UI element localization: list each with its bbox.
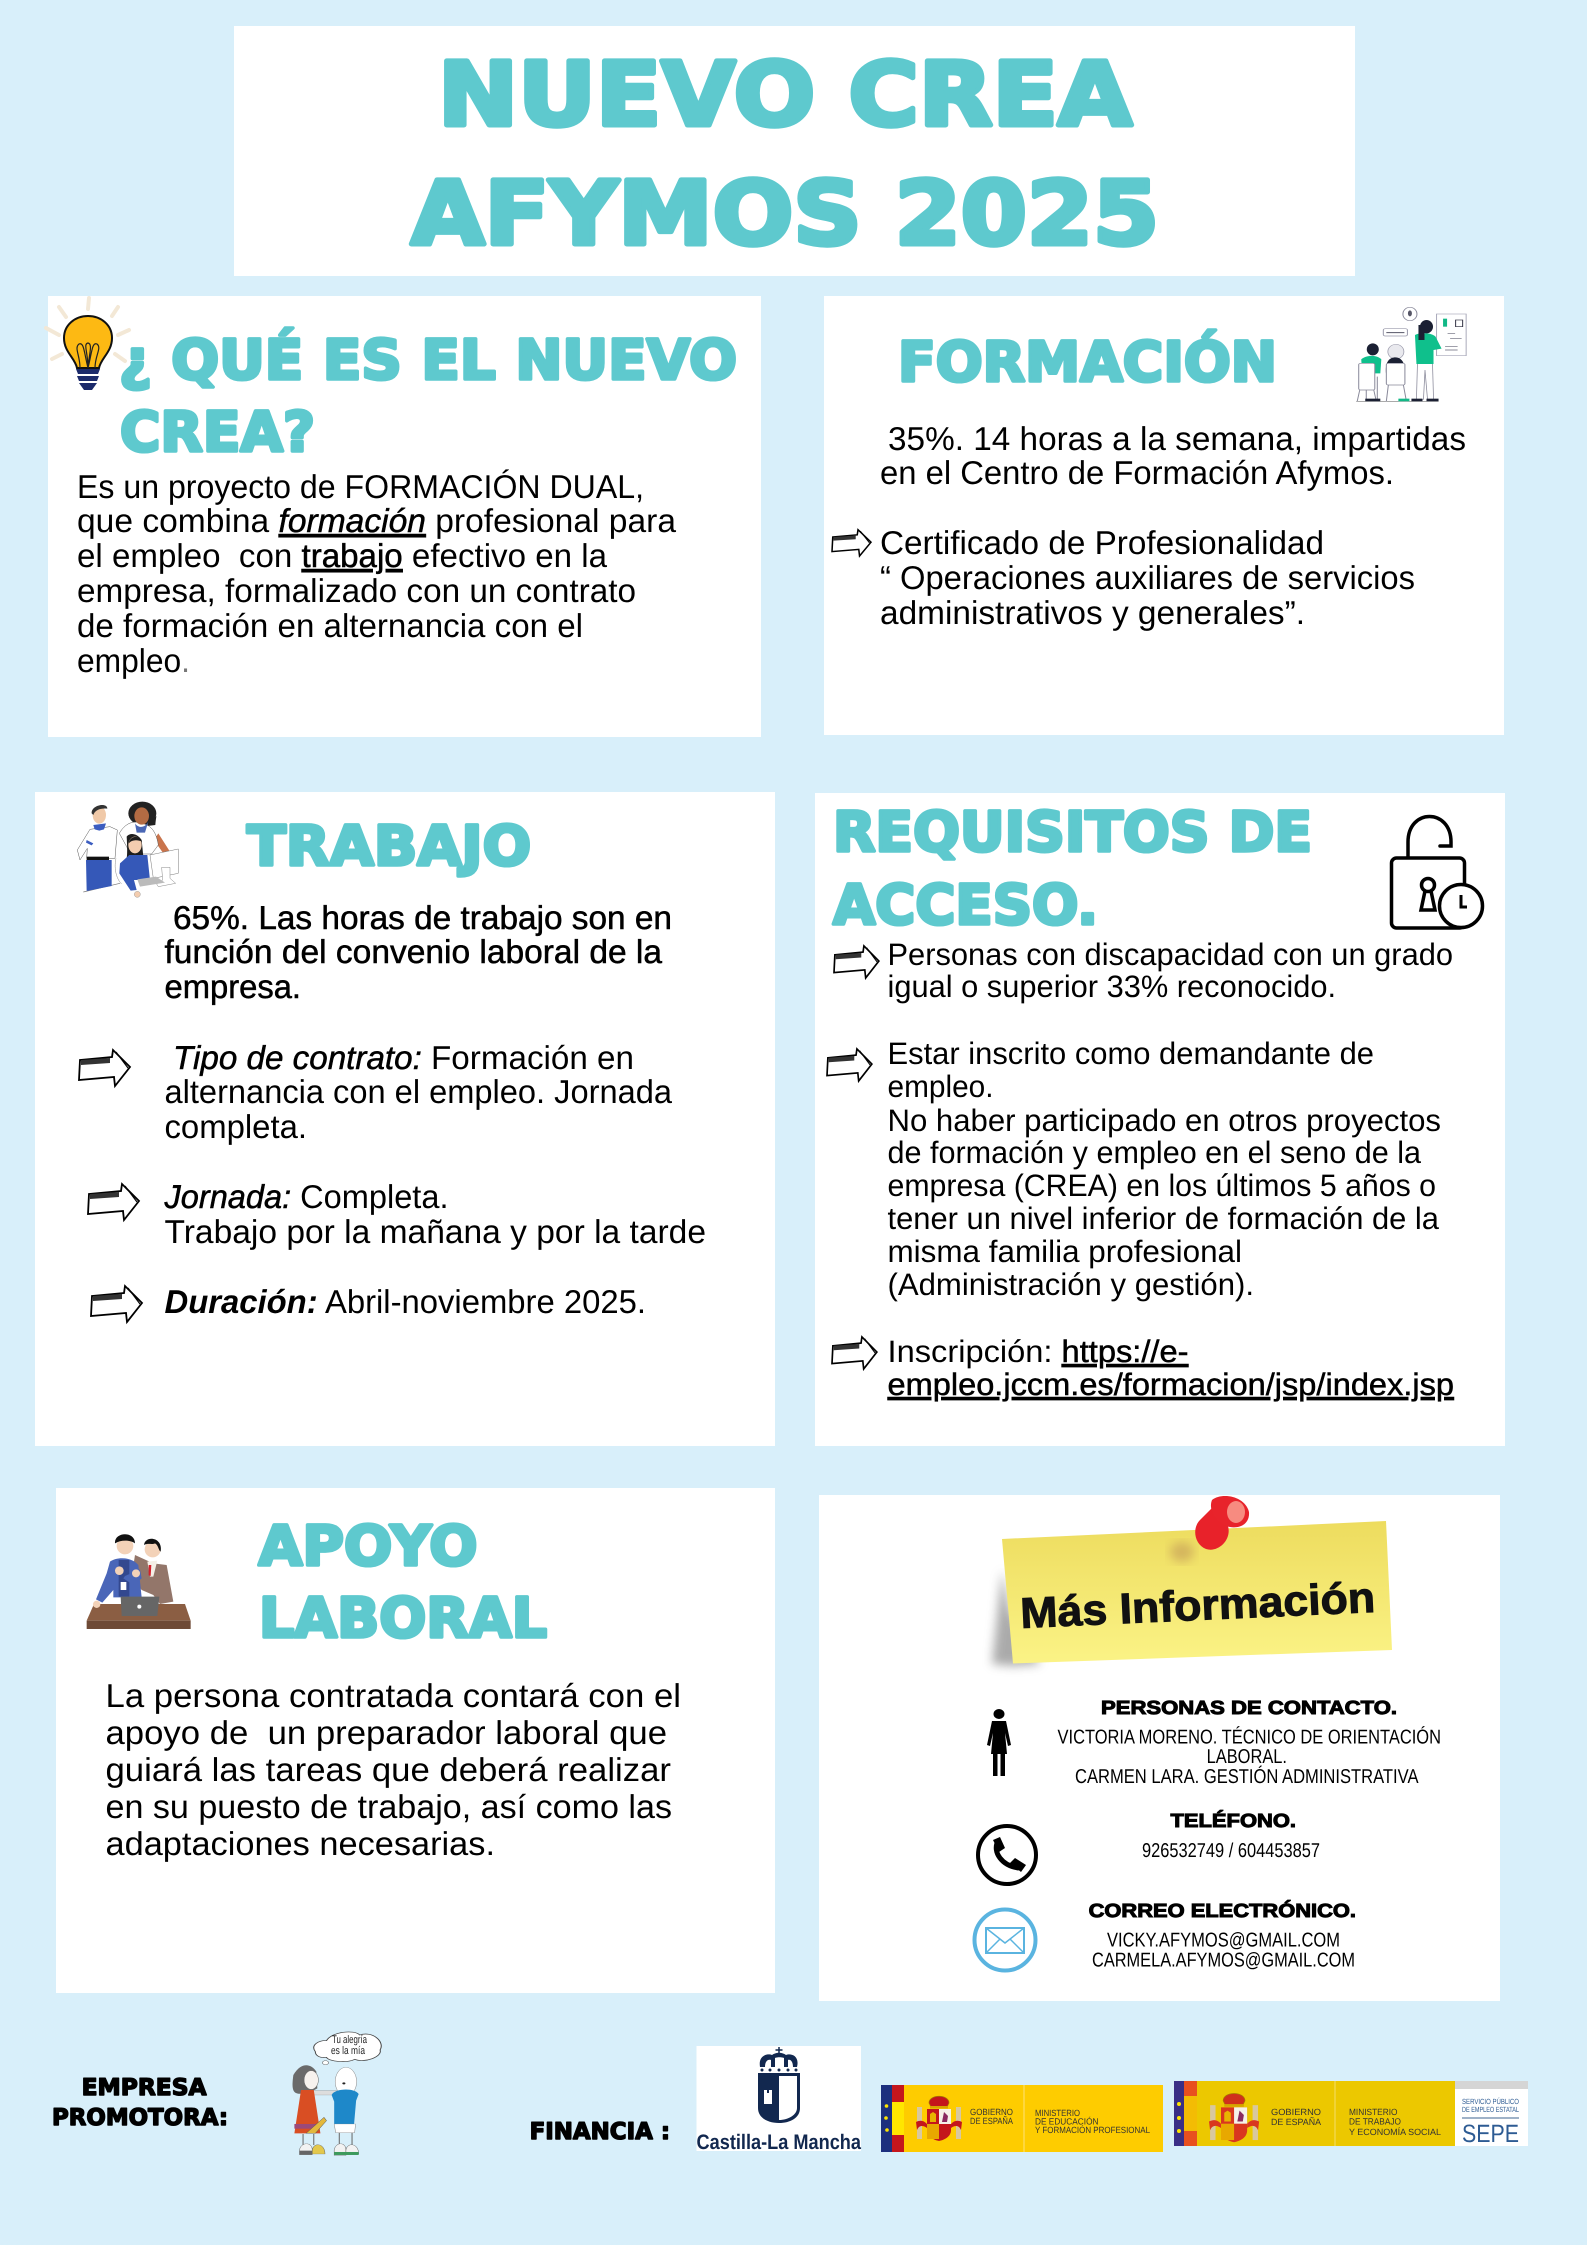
labels: GOBIERNO xyxy=(1271,2107,1321,2117)
icon: light bulb xyxy=(46,298,129,390)
icon: telephone xyxy=(978,1826,1036,1884)
panel: formación xyxy=(824,296,1504,735)
contact people xyxy=(1058,1698,1441,1788)
logo: children illustration xyxy=(293,2032,381,2155)
text block: apoyo de un preparador laboral que xyxy=(106,1714,667,1751)
labels: DE EDUCACIÓN xyxy=(1035,2116,1098,2126)
arrow xyxy=(88,1184,139,1220)
text block: alternancia con el empleo. Jornada xyxy=(164,1073,673,1110)
text block xyxy=(880,420,1466,491)
text block: igual o superior 33% reconocido. xyxy=(888,969,1336,1004)
heading: FORMACIÓN xyxy=(898,330,1277,394)
text block: que combina formación profesional para xyxy=(77,502,677,539)
logo: SEPE xyxy=(1455,2081,1528,2148)
text block xyxy=(888,1334,1454,1402)
email: VICKY.AFYMOS@GMAIL.COM xyxy=(1107,1930,1340,1952)
funder label: FINANCIA : xyxy=(530,2119,670,2145)
text block: de formación y empleo en el seno de la xyxy=(888,1135,1422,1170)
heading: REQUISITOS DE xyxy=(833,800,1312,864)
arrow xyxy=(91,1286,142,1322)
phone xyxy=(1142,1810,1320,1862)
logo: Castilla-La Mancha xyxy=(696,2046,861,2154)
labels: MINISTERIO xyxy=(1035,2108,1080,2118)
phone: TELÉFONO. xyxy=(1170,1810,1296,1832)
text block xyxy=(164,899,672,1005)
text block: función del convenio laboral de la xyxy=(164,933,663,970)
contact people: LABORAL. xyxy=(1207,1746,1287,1768)
contact people: VICTORIA MORENO. TÉCNICO DE ORIENTACIÓN xyxy=(1058,1726,1441,1748)
icon: classroom illustration xyxy=(1356,307,1466,401)
arrow xyxy=(827,1049,872,1081)
text block: Trabajo por la mañana y por la tarde xyxy=(164,1213,706,1250)
title xyxy=(234,26,1355,276)
heading xyxy=(258,1514,547,1650)
text block: Personas con discapacidad con un grado xyxy=(888,937,1453,972)
logo: children illustration: Tu alegría xyxy=(332,2034,368,2046)
email: CARMELA.AFYMOS@GMAIL.COM xyxy=(1092,1950,1355,1972)
promoter label xyxy=(52,2075,228,2131)
labels: Y FORMACIÓN PROFESIONAL xyxy=(1035,2125,1150,2135)
labels xyxy=(970,2107,1150,2135)
contact people: PERSONAS DE CONTACTO. xyxy=(1101,1698,1397,1719)
text block: guiará las tareas que deberá realizar xyxy=(106,1751,671,1788)
text block xyxy=(77,468,677,679)
panel: más información xyxy=(819,1495,1500,2001)
panel: trabajo xyxy=(35,792,775,1446)
heading: CREA? xyxy=(120,400,315,464)
text block: adaptaciones necesarias. xyxy=(106,1825,495,1862)
icon: team illustration xyxy=(77,802,178,897)
logo: Castilla-La Mancha: Castilla-La Mancha xyxy=(696,2131,861,2154)
heading: TRABAJO xyxy=(247,814,531,878)
email: CORREO ELECTRÓNICO. xyxy=(1089,1900,1356,1922)
labels: DE ESPAÑA xyxy=(970,2116,1013,2126)
arrow xyxy=(79,1050,130,1086)
text block: No haber participado en otros proyectos xyxy=(888,1103,1441,1138)
text block: Duración: Abril-noviembre 2025. xyxy=(164,1283,646,1320)
text block: empresa (CREA) en los últimos 5 años o xyxy=(888,1168,1436,1203)
promoter label: PROMOTORA: xyxy=(52,2105,228,2131)
logo: SEPE: SEPE xyxy=(1462,2120,1519,2148)
icon: red push pin xyxy=(1170,1496,1249,1562)
logo: Gobierno de España, Ministerio de Trabajo y SEPE xyxy=(1174,2081,1528,2148)
heading: ACCESO. xyxy=(833,873,1098,937)
text block xyxy=(164,1178,706,1250)
text block: el empleo con trabajo efectivo en la xyxy=(77,537,608,574)
text block: tener un nivel inferior de formación de la xyxy=(888,1201,1440,1236)
text block xyxy=(880,524,1415,631)
heading: LABORAL xyxy=(259,1586,547,1650)
heading: ¿ QUÉ ES EL NUEVO xyxy=(119,328,737,392)
text block: Certificado de Profesionalidad xyxy=(880,524,1324,561)
labels: MINISTERIO xyxy=(1349,2107,1398,2117)
logo: SEPE: SERVICIO PÚBLICO xyxy=(1462,2097,1519,2106)
icon: two colleagues at a desk xyxy=(87,1534,191,1629)
text block: 65%. Las horas de trabajo son en xyxy=(173,899,672,936)
logo: children illustration: es la mía xyxy=(331,2045,366,2057)
text block: de formación en alternancia con el xyxy=(77,607,583,644)
text block xyxy=(164,1039,673,1145)
logo: SEPE: DE EMPLEO ESTATAL xyxy=(1462,2105,1519,2114)
arrow xyxy=(832,530,871,556)
text block xyxy=(106,1677,681,1862)
icon: padlock with clock xyxy=(1392,816,1482,928)
logo: Gobierno de España, Ministerio de Educación xyxy=(881,2085,1163,2152)
text block: Tipo de contrato: Formación en xyxy=(173,1039,634,1076)
labels: Y ECONOMÍA SOCIAL xyxy=(1349,2127,1441,2137)
text block: empresa. xyxy=(164,968,301,1005)
text block xyxy=(888,1036,1441,1302)
text block: empresa, formalizado con un contrato xyxy=(77,572,636,609)
icon: woman xyxy=(987,1709,1011,1776)
text block: misma familia profesional xyxy=(888,1234,1242,1269)
title: NUEVO CREA xyxy=(438,43,1132,146)
text block: Inscripción: https://e- xyxy=(888,1334,1188,1369)
labels: DE TRABAJO xyxy=(1349,2116,1401,2126)
sticky note: Más Información xyxy=(1019,1574,1376,1638)
text block: administrativos y generales”. xyxy=(880,594,1305,631)
text block: Estar inscrito como demandante de xyxy=(888,1036,1374,1071)
icon: coat of arms xyxy=(1209,2093,1259,2142)
text block: empleo.jccm.es/formacion/jsp/index.jsp xyxy=(888,1367,1454,1402)
panel: requisitos de acceso xyxy=(815,793,1505,1446)
icon: coat of arms xyxy=(916,2096,962,2141)
text block xyxy=(888,937,1453,1004)
panel: apoyo laboral xyxy=(56,1488,775,1993)
arrow xyxy=(832,1337,877,1369)
icon: email xyxy=(974,1910,1036,1970)
labels: DE ESPAÑA xyxy=(1271,2117,1321,2127)
promoter label: EMPRESA xyxy=(82,2075,207,2101)
email xyxy=(1089,1900,1356,1972)
phone: 926532749 / 604453857 xyxy=(1142,1840,1320,1862)
heading xyxy=(119,328,737,464)
text block: empleo. xyxy=(77,642,190,679)
text block: empleo. xyxy=(888,1069,994,1104)
contact people: CARMEN LARA. GESTIÓN ADMINISTRATIVA xyxy=(1075,1765,1419,1788)
title: AFYMOS 2025 xyxy=(411,162,1159,265)
heading xyxy=(833,800,1312,937)
text block: completa. xyxy=(164,1108,307,1145)
text block: en su puesto de trabajo, así como las xyxy=(106,1788,672,1825)
text block: Jornada: Completa. xyxy=(164,1178,448,1215)
text block: “ Operaciones auxiliares de servicios xyxy=(880,559,1415,596)
arrow xyxy=(834,946,879,978)
heading: APOYO xyxy=(258,1514,478,1578)
labels xyxy=(1271,2107,1441,2137)
panel: qué es el nuevo crea xyxy=(46,296,761,737)
text block: (Administración y gestión). xyxy=(888,1267,1254,1302)
text block: Es un proyecto de FORMACIÓN DUAL, xyxy=(77,468,644,505)
text block: en el Centro de Formación Afymos. xyxy=(880,454,1394,491)
labels: GOBIERNO xyxy=(970,2107,1013,2117)
sticky note xyxy=(992,1521,1392,1666)
text block: La persona contratada contará con el xyxy=(106,1677,681,1714)
text block: 35%. 14 horas a la semana, impartidas xyxy=(888,420,1466,457)
